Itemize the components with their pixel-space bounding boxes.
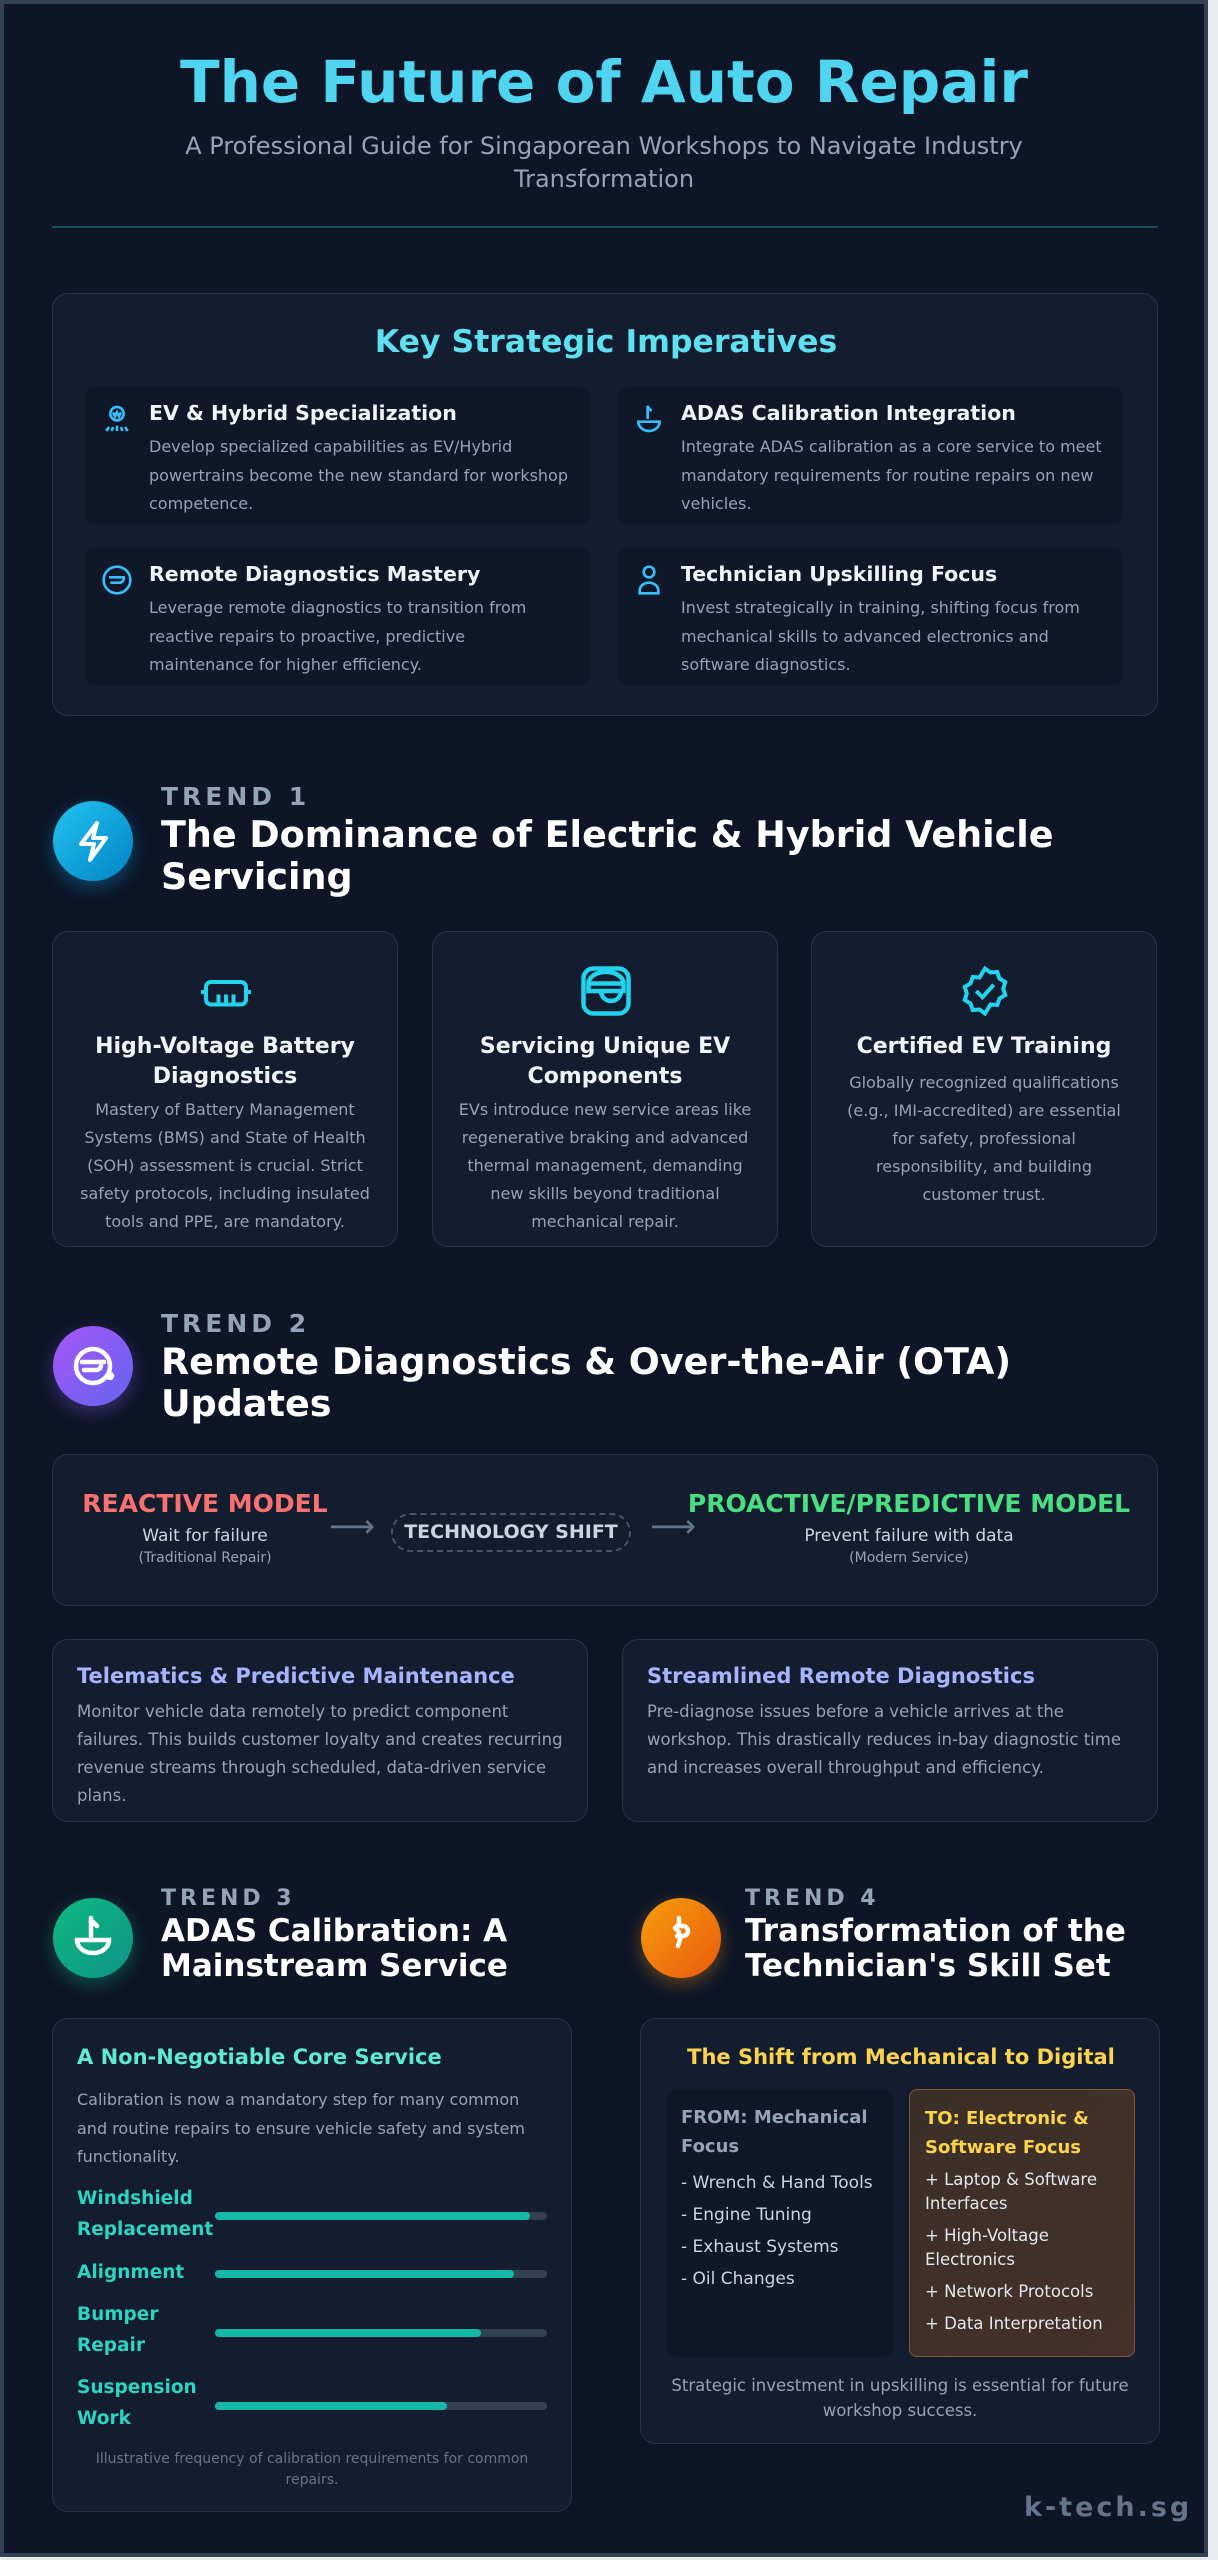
trend title: Transformation of the Technician's Skill Set [745, 1913, 1126, 1984]
to column [909, 2089, 1135, 2357]
trend 3 header [46, 1886, 508, 1992]
trend title: Remote Diagnostics & Over-the-Air (OTA) Updates [161, 1340, 1011, 1425]
panel: model shift [52, 1454, 1158, 1606]
reactive model: (Traditional Repair) [138, 1550, 272, 1566]
imperative: remote diagnostics: Remote Diagnostics Mastery [149, 562, 480, 586]
icon: components [581, 966, 631, 1016]
card: telematics: Telematics & Predictive Maintenance [77, 1664, 515, 1688]
reactive model: REACTIVE MODEL [82, 1489, 328, 1518]
reactive model [82, 1489, 328, 1566]
bar chart [77, 2188, 547, 2429]
proactive model: PROACTIVE/PREDICTIVE MODEL [688, 1489, 1130, 1518]
imperative: remote diagnostics: Leverage remote diagnostics to transition from reactive repairs to proactive, predictive maintenance for higher efficiency. [149, 598, 526, 674]
bar chart: Bumper [77, 2304, 158, 2325]
card: telematics [52, 1639, 588, 1822]
panel: key strategic imperatives [52, 293, 1158, 716]
imperative: upskilling: Technician Upskilling Focus [681, 562, 997, 586]
trend 1 header [44, 782, 1054, 898]
to column: TO: Electronic & Software Focus [925, 2108, 1089, 2158]
from column: - Oil Changes [681, 2269, 795, 2289]
from column: - Engine Tuning [681, 2205, 812, 2225]
imperative: upskilling: Invest strategically in training, shifting focus from mechanical skills to advanced electronics and software diagnostics. [681, 598, 1080, 674]
imperative: upskilling [617, 548, 1123, 685]
panel heading: Key Strategic Imperatives [375, 324, 837, 360]
bar chart: Replacement [77, 2219, 213, 2240]
card: remote diagnostics: Streamlined Remote Diagnostics [647, 1664, 1035, 1688]
panel: ADAS calibration bars: Illustrative frequency of calibration requirements for common repairs. [96, 2451, 528, 2488]
from column [667, 2089, 893, 2357]
trend title: ADAS Calibration: A Mainstream Service [161, 1913, 508, 1984]
card: remote diagnostics: Pre-diagnose issues before a vehicle arrives at the workshop. This drastically reduces in-bay diagnostic time and increases overall throughput and efficiency. [647, 1702, 1121, 1777]
icon: adas [53, 1898, 133, 1978]
proactive model: (Modern Service) [849, 1550, 969, 1566]
panel: ADAS calibration bars [52, 2018, 572, 2512]
card: battery: High-Voltage Battery Diagnostics [95, 1034, 355, 1089]
from column: - Wrench & Hand Tools [681, 2173, 873, 2193]
to column: + Data Interpretation [925, 2314, 1103, 2333]
card: remote diagnostics [622, 1639, 1158, 1822]
to column: + Network Protocols [925, 2282, 1093, 2301]
panel: skill shift [640, 2018, 1160, 2444]
bar chart: Suspension [77, 2377, 197, 2398]
card: telematics: Monitor vehicle data remotely to predict component failures. This builds customer loyalty and creates recurring revenue streams through scheduled, data-driven service plans. [77, 1702, 563, 1805]
imperative: EV [85, 387, 591, 524]
card: battery: Mastery of Battery Management Systems (BMS) and State of Health (SOH) assessment is crucial. Strict safety protocols, including insulated tools and PPE, are mandatory. [80, 1100, 370, 1231]
card: certified training: Certified EV Training [857, 1034, 1111, 1059]
card: certified training [811, 931, 1157, 1247]
bar chart: Repair [77, 2335, 145, 2356]
card: certified training: Globally recognized qualifications (e.g., IMI-accredited) are essential for safety, professional responsibility, and building customer trust. [847, 1073, 1121, 1204]
proactive model [688, 1489, 1130, 1566]
trend title: The Dominance of Electric & Hybrid Vehicle Servicing [161, 813, 1054, 898]
to column: + Laptop & Software Interfaces [925, 2170, 1097, 2213]
trend label: TREND 1 [161, 782, 310, 811]
trend label: TREND 3 [161, 1886, 296, 1911]
from column: FROM: Mechanical Focus [681, 2107, 868, 2157]
imperative: ADAS: Integrate ADAS calibration as a core service to meet mandatory requirements for routine repairs on new vehicles. [681, 437, 1102, 513]
subtitle: A Professional Guide for Singaporean Workshops to Navigate Industry Transformation [185, 132, 1023, 193]
icon: technician [641, 1898, 721, 1978]
card: EV components: EVs introduce new service areas like regenerative braking and advanced thermal management, demanding new skills beyond traditional mechanical repair. [459, 1100, 751, 1231]
trend label: TREND 4 [745, 1886, 880, 1911]
title: The Future of Auto Repair [180, 48, 1028, 116]
imperative: EV: Develop specialized capabilities as EV/Hybrid powertrains become the new standard for workshop competence. [149, 437, 568, 513]
trend label: TREND 2 [161, 1309, 310, 1338]
technology shift pill: TECHNOLOGY SHIFT [404, 1521, 618, 1543]
imperative: EV: EV & Hybrid Specialization [149, 401, 457, 425]
card: battery [52, 931, 398, 1247]
panel: ADAS calibration bars: A Non-Negotiable Core Service [77, 2045, 442, 2069]
reactive model: Wait for failure [142, 1526, 268, 1546]
icon: remote [53, 1326, 133, 1406]
card: EV components [432, 931, 778, 1247]
footer brand: k-tech.sg [1024, 2492, 1192, 2523]
bar chart: Windshield [77, 2188, 193, 2209]
proactive model: Prevent failure with data [804, 1526, 1014, 1546]
icon: lightning [53, 801, 133, 881]
bar chart: Work [77, 2408, 131, 2429]
icon: battery [201, 980, 251, 1006]
card: EV components: Servicing Unique EV Components [480, 1034, 730, 1089]
arrow: ⟶ [329, 1507, 375, 1545]
imperative: ADAS [617, 387, 1123, 524]
imperative: ADAS: ADAS Calibration Integration [681, 401, 1016, 425]
to column: + High-Voltage Electronics [925, 2226, 1049, 2269]
bar chart: Alignment [77, 2262, 184, 2283]
arrow: ⟶ [650, 1507, 696, 1545]
from column: - Exhaust Systems [681, 2237, 838, 2257]
panel: ADAS calibration bars: Calibration is now a mandatory step for many common and routine repairs to ensure vehicle safety and system functionality. [77, 2090, 525, 2166]
icon: badge check [962, 966, 1008, 1016]
technology shift pill [391, 1513, 631, 1552]
imperative: remote diagnostics [85, 548, 591, 685]
panel: skill shift: The Shift from Mechanical to Digital [687, 2045, 1115, 2069]
trend 1 cards [52, 931, 1157, 1247]
trend 4 header [631, 1886, 1126, 1994]
trend 2 header [44, 1309, 1011, 1425]
panel: skill shift: Strategic investment in upskilling is essential for future workshop success. [671, 2376, 1129, 2420]
